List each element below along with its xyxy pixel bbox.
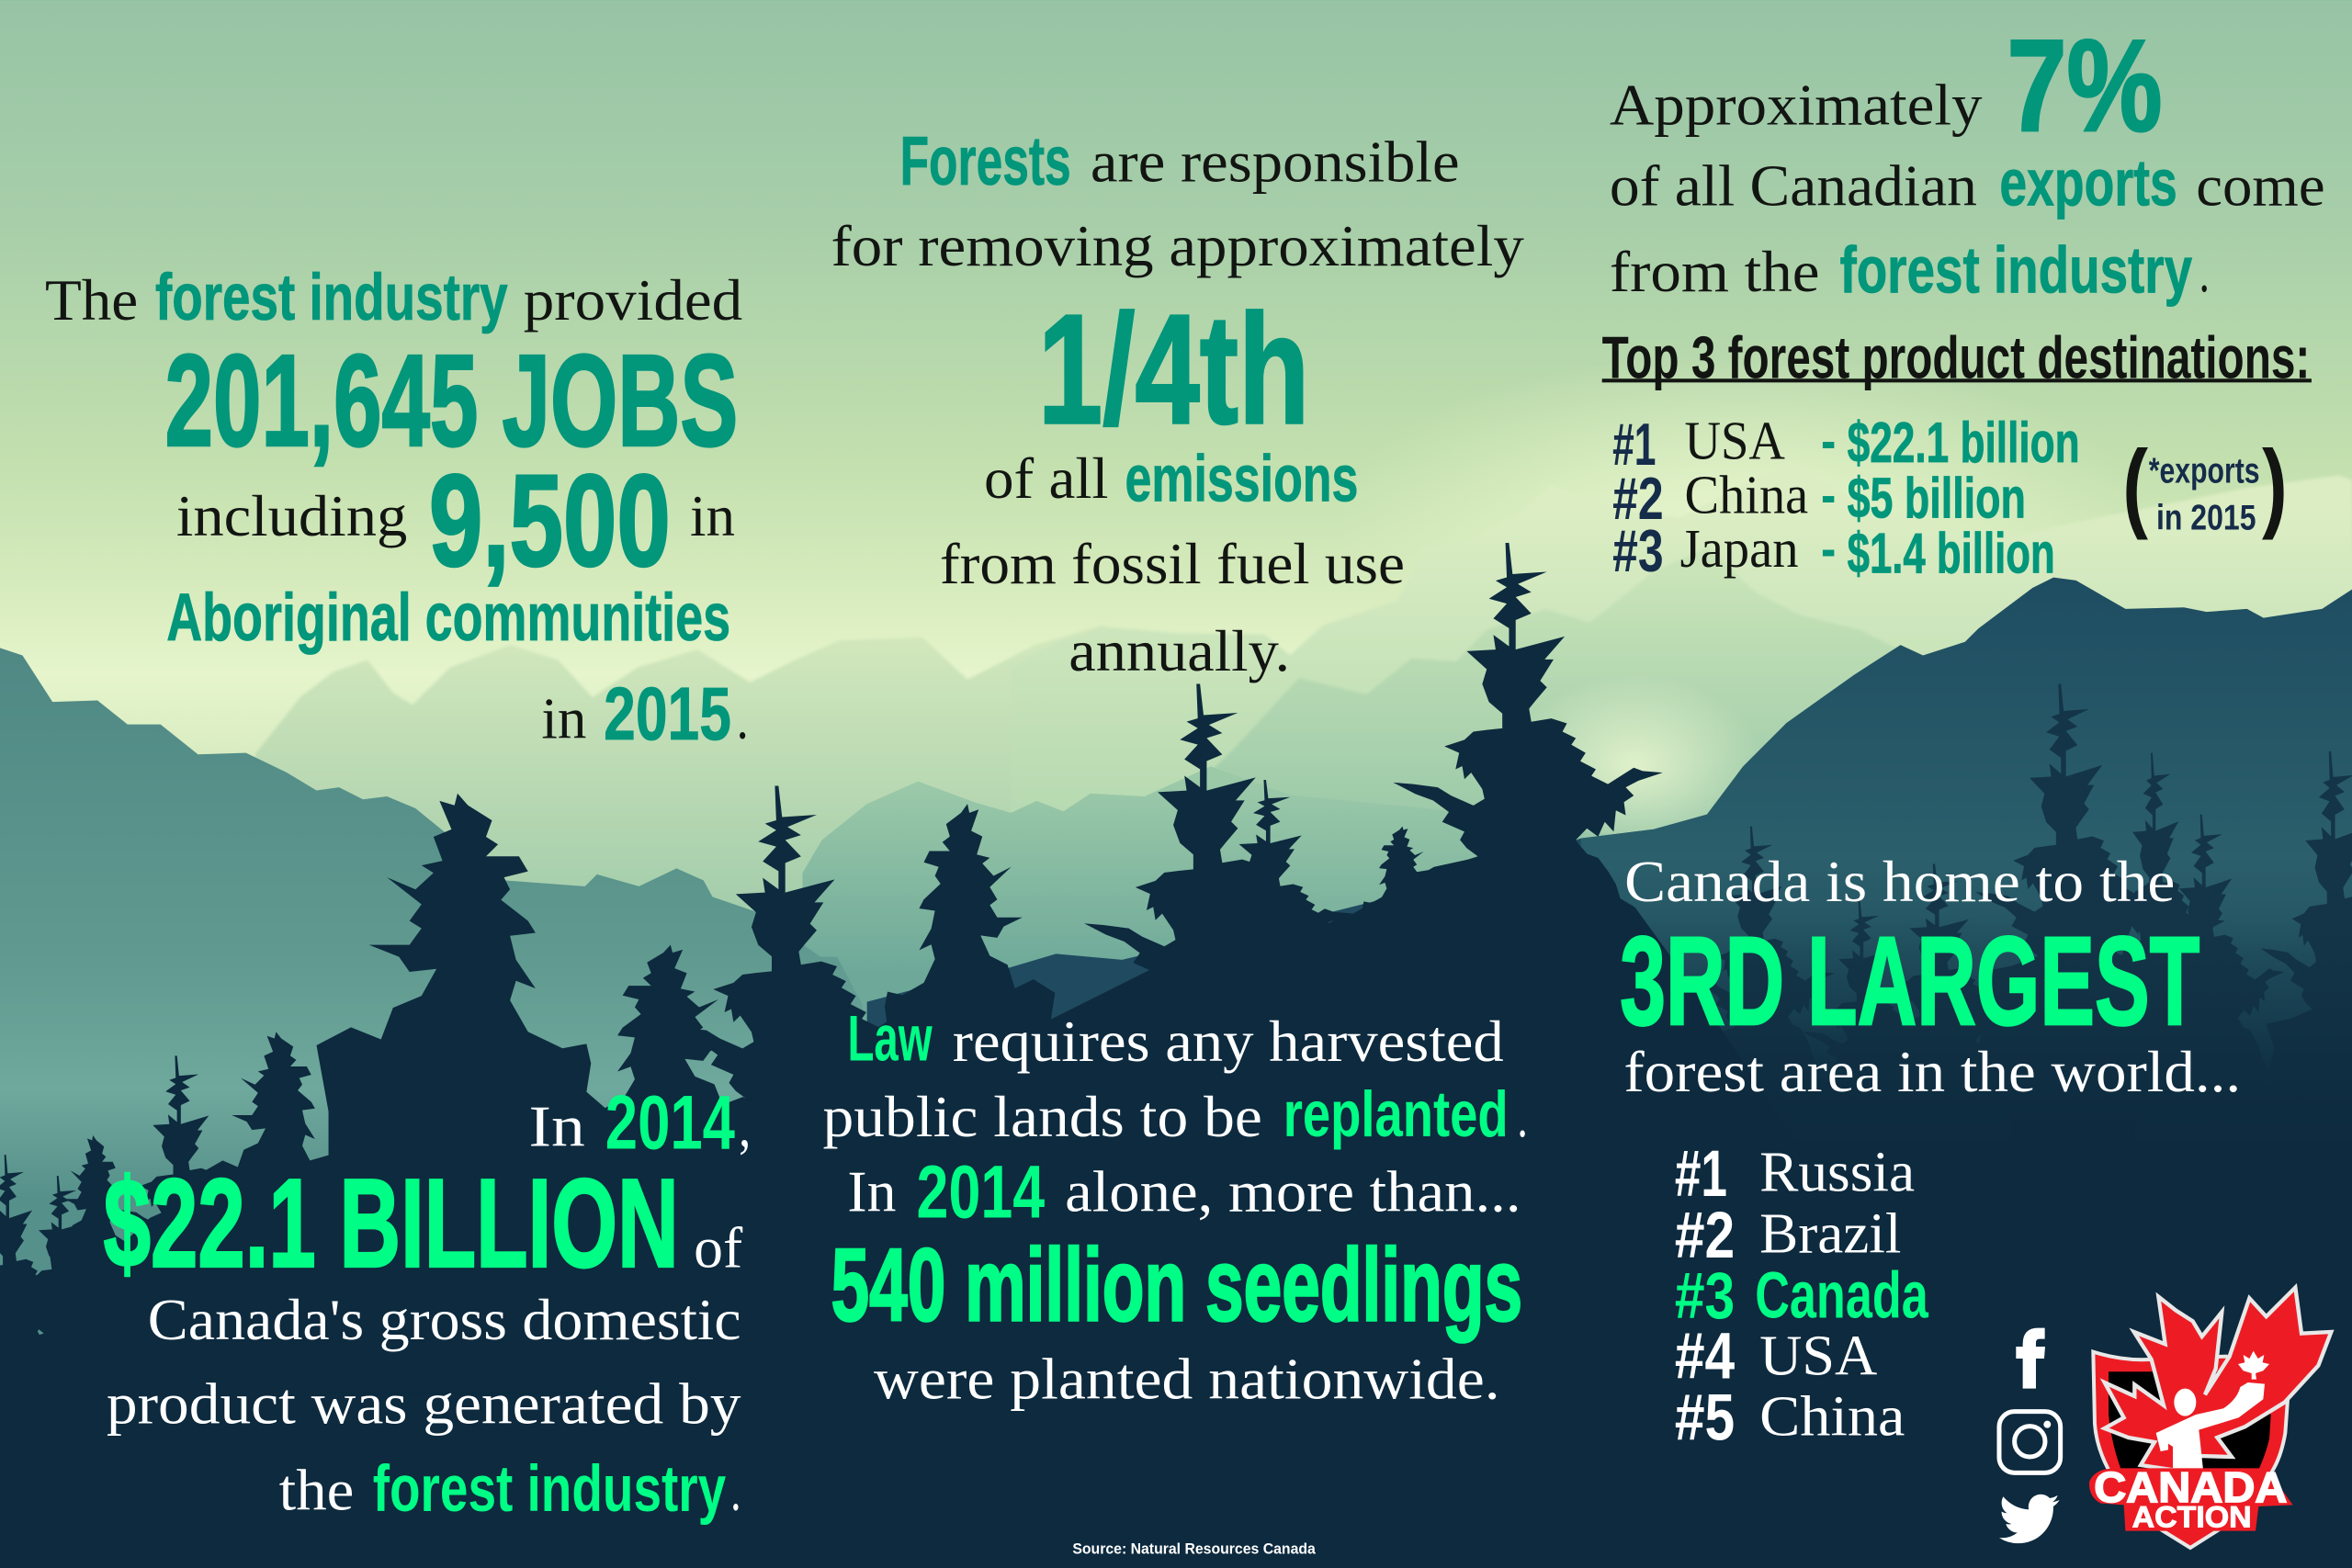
sentence: in 2014: , (739, 1093, 751, 1158)
list: destinations: $22.1 billion (1848, 412, 2080, 475)
list: forest area ranking: #4 (1675, 1319, 1735, 1393)
sentence: annually: annually. (1069, 618, 1290, 683)
sentence: of all emissions: emissions (1125, 442, 1358, 515)
list: forest area ranking (1675, 1137, 1929, 1454)
list: destinations: #3 (1612, 517, 1664, 584)
highlight: aboriginal communities: Aboriginal communities (166, 579, 730, 655)
list: destinations: Japan (1680, 519, 1799, 579)
sentence: in 2015: 2015 (604, 672, 731, 756)
list: destinations: - (1821, 465, 1836, 525)
list: forest area ranking: #1 (1675, 1137, 1727, 1211)
sentence: in 2014 alone: 2014 (917, 1151, 1045, 1235)
text block: forests and emissions (831, 122, 1524, 683)
sentence: for removing approximately: for removing approximately (831, 213, 1524, 278)
list: destinations: $1.4 billion (1848, 523, 2055, 586)
list: destinations: #2 (1612, 465, 1664, 532)
pale mist by right mountain (1508, 675, 1762, 855)
sentence: of all canadian exports come (1610, 147, 2325, 220)
sentence: in 2015 (541, 672, 749, 756)
icon: facebook (2016, 1328, 2045, 1389)
sentence: in 2014 alone (847, 1151, 1521, 1235)
sentence: in 2015: in (541, 685, 586, 750)
sentence: in 2014 alone: alone, more than... (1065, 1158, 1521, 1224)
sentence: in 2014: In (529, 1093, 585, 1158)
list: destinations: $5 billion (1848, 467, 2026, 530)
list: forest area ranking: #2 (1675, 1199, 1735, 1272)
icon: twitter (1999, 1495, 2060, 1543)
text block: forest industry jobs (45, 261, 749, 756)
logo: canada action: CANADA (2094, 1463, 2287, 1511)
dark middle mountain (867, 829, 1653, 1140)
sentence: canada's gross domestic: Canada's gross domestic (148, 1287, 741, 1352)
text block: replanting law (823, 1001, 1528, 1411)
middle mountain layer (802, 766, 1650, 1080)
list: forest area ranking: Brazil (1759, 1202, 1901, 1265)
stat: $22.1 billion of: $22.1 BILLION (104, 1154, 679, 1294)
note: exports in 2015: ( (2122, 429, 2148, 540)
text block: exports (1602, 13, 2325, 586)
stat: 1/4th: 1/4th (1038, 281, 1309, 456)
sentence: from the forest industry: forest industry (1839, 233, 2192, 307)
sentence: were planted nationwide: were planted nationwide. (874, 1346, 1500, 1411)
sentence: of all canadian exports come: come (2196, 153, 2325, 219)
sentence: forests are responsible: Forests (900, 122, 1071, 199)
sentence: the forest industry: forest industry (373, 1452, 726, 1526)
sentence: including 9,500 in (176, 448, 735, 594)
sentence: from the forest industry (1610, 233, 2210, 307)
right mountain (1581, 578, 2352, 1200)
stat: 540 million seedlings: 540 million seedlings (831, 1227, 1522, 1343)
sentence: in 2014 (529, 1080, 751, 1166)
far mountain range right (1011, 460, 2352, 960)
list: forest area ranking: China (1759, 1385, 1905, 1448)
stat: 201,645 jobs: 201,645 JOBS (165, 328, 738, 474)
second misty mountain range (1170, 547, 1935, 960)
sentence: of all emissions (984, 442, 1358, 515)
sentence: public lands replanted: replanted (1283, 1077, 1509, 1150)
list: destinations: - (1821, 519, 1836, 579)
note: exports in 2015: ) (2262, 429, 2288, 540)
list: forest area ranking: #3 (1675, 1259, 1735, 1333)
sentence: including 9,500 in: 9,500 (429, 448, 671, 594)
note: exports in 2015 (2122, 429, 2288, 540)
sentence: of all canadian exports come: exports (1999, 147, 2177, 220)
sentence: approximately 7%: Approximately (1610, 73, 1983, 138)
faint trees on right mountain (1680, 684, 2352, 1170)
sentence: including 9,500 in: including (176, 483, 407, 548)
sentence: in 2014: 2014 (605, 1080, 735, 1166)
sentence: in 2014 alone: In (847, 1158, 897, 1224)
sentence: public lands replanted: . (1517, 1084, 1528, 1149)
list: forest area ranking: Russia (1759, 1141, 1915, 1203)
icons and logo (1999, 1288, 2331, 1548)
list: destinations (1612, 411, 2080, 586)
left mountain (0, 648, 885, 1410)
list: forest area ranking: #5 (1675, 1381, 1735, 1454)
source note: Source: Natural Resources Canada (1072, 1540, 1317, 1557)
list: destinations: China (1684, 465, 1808, 525)
note: exports in 2015: in 2015 (2156, 498, 2256, 537)
logo: canada action (2089, 1288, 2331, 1548)
sentence: the forest industry provided: forest industry (155, 261, 508, 334)
sentence: of all canadian exports come: of all Canadian (1610, 153, 1977, 219)
ground and tree silhouettes (0, 543, 2352, 1568)
sentence: from fossil fuel use: from fossil fuel use (940, 531, 1405, 596)
sentence: approximately 7%: 7% (2007, 13, 2162, 159)
text block: gross domestic product (104, 1080, 751, 1526)
sentence: of all emissions: of all (984, 446, 1109, 511)
light glow right (1335, 353, 2145, 682)
text block: third largest forest (1620, 849, 2241, 1454)
sentence: the forest industry (279, 1452, 741, 1526)
sentence: public lands replanted (823, 1077, 1528, 1150)
list: destinations: USA (1684, 412, 1785, 471)
sentence: forests are responsible (900, 122, 1460, 199)
sentence: in 2015: . (737, 685, 749, 750)
sentence: product was generated by: product was generated by (107, 1371, 741, 1436)
sentence: canada is home to the: Canada is home to the (1624, 849, 2175, 914)
note: exports in 2015: *exports (2149, 452, 2260, 491)
sentence: forest area in the world: forest area in the world... (1623, 1039, 2241, 1104)
icon: instagram (1999, 1412, 2061, 1472)
list: destinations: #1 (1612, 411, 1656, 478)
lower right fade (1581, 915, 2352, 1162)
list: forest area ranking: USA (1759, 1325, 1877, 1387)
sentence: the forest industry: the (279, 1457, 354, 1522)
sentence: public lands replanted: public lands to be (823, 1084, 1262, 1149)
stat: $22.1 billion of: of (694, 1215, 743, 1280)
sentence: the forest industry provided: provided (524, 267, 742, 333)
logo: canada action: ACTION (2132, 1500, 2252, 1534)
sentence: the forest industry: . (730, 1457, 741, 1522)
sentence: the forest industry provided: The (45, 267, 138, 333)
sentence: including 9,500 in: in (690, 483, 735, 548)
far mountain range left (255, 626, 1350, 1050)
list: forest area ranking: Canada (1755, 1258, 1929, 1332)
sentence: from the forest industry: . (2199, 239, 2210, 304)
sentence: forests are responsible: are responsible (1091, 130, 1460, 195)
list: destinations: - (1821, 412, 1836, 471)
sentence: the forest industry provided (45, 261, 742, 334)
sentence: law requires: Law (847, 1001, 933, 1074)
sentence: approximately 7% (1610, 13, 2162, 159)
sentence: from the forest industry: from the (1610, 239, 1819, 304)
sentence: law requires: requires any harvested (953, 1009, 1504, 1074)
